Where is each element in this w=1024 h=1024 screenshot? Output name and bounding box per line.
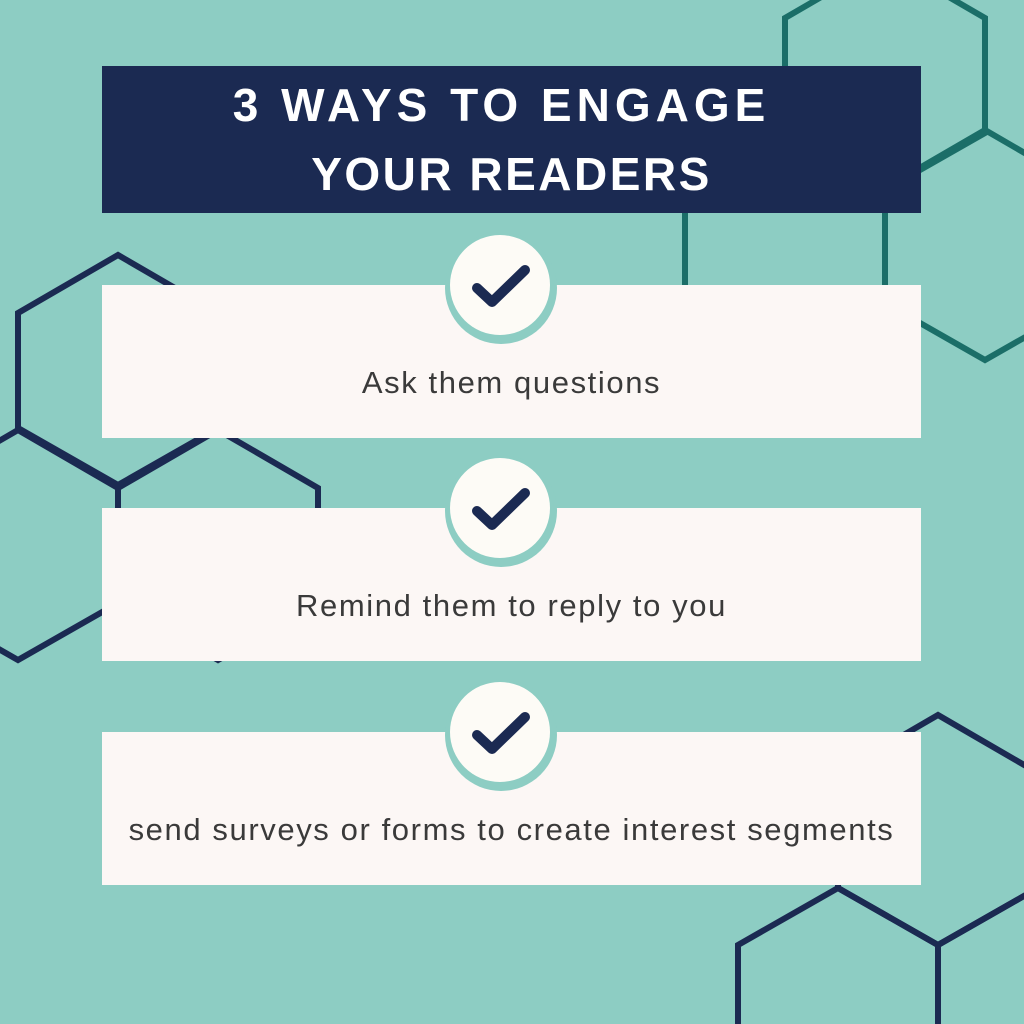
card 3 [102, 732, 921, 885]
card 1 [102, 285, 921, 438]
card 2 [102, 508, 921, 661]
title [102, 66, 921, 213]
icon: check 3 [445, 679, 557, 791]
icon: check 1 [445, 232, 557, 344]
card 1: Ask them questions [362, 365, 661, 400]
title: 3 WAYS TO ENGAGE [233, 79, 770, 131]
card 2: Remind them to reply to you [296, 588, 727, 623]
card 3: send surveys or forms to create interest segments [129, 812, 894, 847]
title: YOUR READERS [311, 148, 712, 200]
icon: check 2 [445, 455, 557, 567]
